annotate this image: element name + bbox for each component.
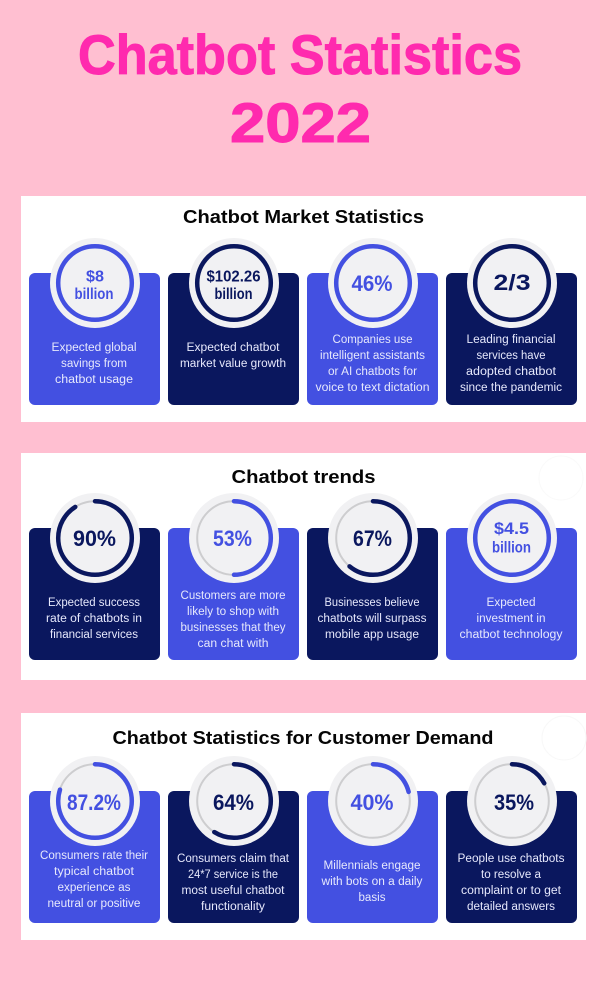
- card: $4.5 billion: billion: [492, 540, 531, 556]
- card: 2/3: 2/3: [494, 270, 530, 295]
- card: 67%: chatbots will surpass: [318, 613, 427, 625]
- card: 2/3: [446, 238, 577, 405]
- card: 46%: Companies use: [332, 334, 412, 346]
- card: 46%: 46%: [352, 271, 392, 296]
- card: 2/3: services have: [476, 350, 546, 362]
- card: $102.26 billion: billion: [214, 286, 252, 303]
- heading: customer demand: Chatbot Statistics for Customer Demand: [112, 727, 494, 748]
- card: 53%: likely to shop with: [187, 606, 279, 618]
- card: $8 billion: $8: [86, 268, 104, 286]
- card: 53%: can chat with: [198, 638, 268, 650]
- card: 64%: 24*7 service is the: [188, 869, 278, 881]
- card: 35%: to resolve a: [481, 869, 542, 881]
- card: 2/3: since the pandemic: [460, 382, 562, 394]
- card: $4.5 billion: $4.5: [494, 519, 529, 538]
- card: $4.5 billion: investment in: [476, 613, 546, 625]
- card: 35%: complaint or to get: [461, 885, 562, 897]
- card: 46%: [307, 238, 438, 405]
- card: 87.2%: typical chatbot: [54, 866, 135, 878]
- card: 67%: Businesses believe: [324, 597, 420, 609]
- card: $102.26 billion: market value growth: [180, 358, 286, 370]
- card: $102.26 billion: $102.26: [206, 268, 261, 286]
- card: 2/3: adopted chatbot: [466, 366, 557, 378]
- heading: chatbot market statistics: Chatbot Market Statistics: [183, 206, 424, 227]
- panel: customer demand: [21, 713, 586, 940]
- card: 40%: basis: [358, 892, 386, 904]
- card: $102.26 billion: Expected chatbot: [186, 342, 280, 354]
- card: 67%: mobile app usage: [325, 629, 419, 641]
- card: $102.26 billion: [168, 238, 299, 405]
- card: $4.5 billion: Expected: [486, 597, 536, 609]
- card: 46%: or AI chatbots for: [328, 366, 417, 378]
- title: 2022: [230, 91, 371, 154]
- card: 90%: 90%: [73, 526, 116, 551]
- card: 87.2%: Consumers rate their: [40, 850, 148, 862]
- card: 53%: 53%: [213, 526, 252, 551]
- card: 64%: Consumers claim that: [177, 853, 290, 865]
- panel: chatbot trends: [21, 453, 586, 680]
- card: $8 billion: billion: [74, 286, 114, 303]
- title: Chatbot Statistics: [78, 23, 522, 86]
- card: 40%: with bots on a daily: [320, 876, 423, 888]
- card: $8 billion: chatbot usage: [55, 374, 133, 386]
- card: 40%: 40%: [350, 790, 394, 815]
- card: 67%: 67%: [353, 526, 392, 551]
- title: [78, 23, 522, 154]
- card: 87.2%: [29, 756, 160, 923]
- card: 87.2%: experience as: [58, 882, 131, 894]
- card: 90%: rate of chatbots in: [46, 613, 142, 625]
- card: 2/3: Leading financial: [466, 334, 556, 346]
- card: 90%: Expected success: [48, 597, 140, 609]
- card: 64%: [168, 756, 299, 923]
- card: 67%: [307, 493, 438, 660]
- card: 87.2%: 87.2%: [67, 790, 121, 815]
- card: 53%: [168, 493, 299, 660]
- card: 64%: most useful chatbot: [182, 885, 285, 897]
- card: 35%: 35%: [494, 790, 534, 815]
- card: 35%: detailed answers: [467, 901, 555, 913]
- card: $8 billion: [29, 238, 160, 405]
- card: 46%: intelligent assistants: [320, 350, 425, 362]
- card: 40%: [307, 756, 438, 923]
- card: 35%: People use chatbots: [458, 853, 565, 865]
- card: 64%: functionality: [201, 901, 265, 913]
- card: $4.5 billion: chatbot technology: [460, 629, 563, 641]
- card: $8 billion: Expected global: [52, 342, 136, 354]
- heading: chatbot trends: Chatbot trends: [232, 466, 376, 487]
- card: 35%: [446, 756, 577, 923]
- card: 53%: Customers are more: [180, 590, 286, 602]
- card: 87.2%: neutral or positive: [48, 898, 140, 910]
- card: 64%: 64%: [213, 790, 254, 815]
- card: 46%: voice to text dictation: [316, 382, 430, 394]
- card: 40%: Millennials engage: [324, 860, 420, 872]
- card: $4.5 billion: [446, 493, 577, 660]
- panel: chatbot market statistics: [21, 196, 586, 422]
- card: 90%: [29, 493, 160, 660]
- card: 53%: businesses that they: [180, 622, 286, 634]
- card: $8 billion: savings from: [61, 358, 127, 370]
- card: 90%: financial services: [50, 629, 138, 641]
